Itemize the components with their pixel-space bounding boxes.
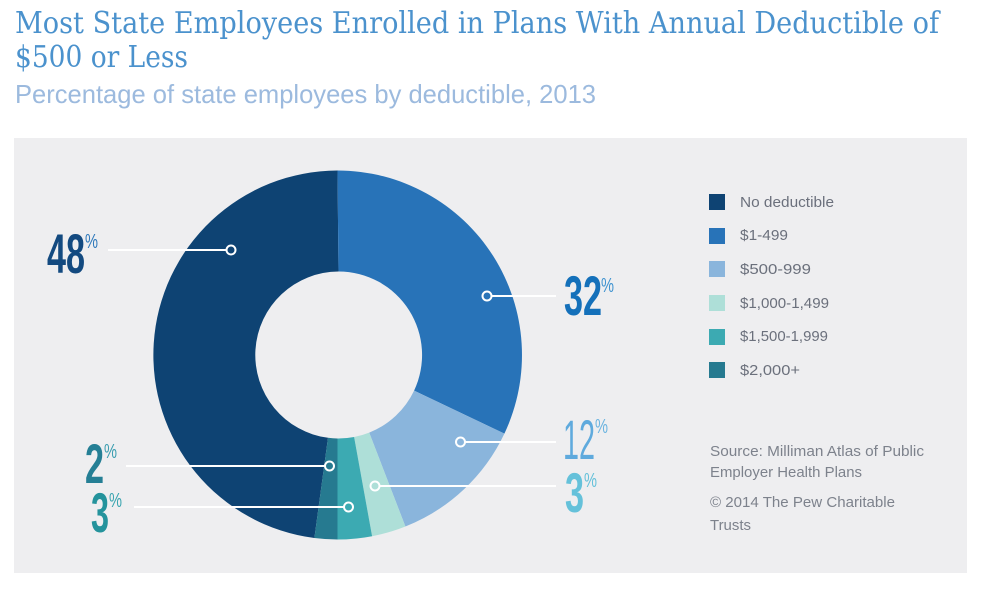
segment: $1-499 32% (338, 170, 522, 434)
callout: 32%: % (601, 275, 614, 297)
callout: 12%: 12 (563, 408, 595, 471)
panel: chart background (14, 138, 967, 573)
legend item: $2,000+ (709, 362, 800, 379)
callout: 32% (482, 264, 614, 327)
legend item: $500-999 (709, 261, 811, 278)
legend (709, 194, 834, 379)
source note: Source: Milliman Atlas of Public (710, 443, 924, 460)
callout: 3% right: % (584, 470, 597, 492)
segment: $1,500-1,999 3% (338, 437, 372, 540)
source note: Employer Health Plans (710, 464, 862, 481)
callout: 3% right (370, 461, 597, 524)
segment: no deductible 48% (153, 170, 338, 538)
callout: 3% left (91, 481, 353, 544)
title: $500 or Less (15, 40, 188, 75)
segment: $500-999 12% (369, 391, 504, 526)
callout: 32%: 32 (564, 264, 602, 327)
callout: 48% (47, 222, 236, 285)
donut chart (153, 170, 522, 540)
segment: $2,000+ 2% (314, 438, 338, 540)
callout: 2%: % (104, 441, 117, 463)
callout: 2% (85, 432, 334, 495)
callout: 12%: % (595, 416, 608, 438)
callout: 3% right: 3 (565, 461, 584, 524)
legend item: no deductible: No deductible (740, 194, 834, 211)
callout: 3% left: 3 (91, 481, 109, 544)
callout: 2%: 2 (85, 432, 104, 495)
legend item: $1,500-1,999: $1,500-1,999 (740, 328, 828, 345)
title (15, 6, 941, 75)
legend item: $500-999: $500-999 (740, 261, 811, 278)
segment: $1,000-1,499 3% (354, 433, 405, 536)
legend item: $1,000-1,499: $1,000-1,499 (740, 295, 829, 312)
legend item: $1-499: $1-499 (740, 227, 788, 244)
source note (710, 443, 924, 481)
callout: 12% (456, 408, 608, 471)
legend item: $1-499 (709, 227, 788, 244)
copyright note (710, 494, 895, 534)
subtitle: Percentage of state employees by deductible, 2013 (15, 79, 596, 109)
copyright note: Trusts (710, 517, 751, 534)
callout: 48%: % (85, 231, 98, 253)
legend item: $2,000+: $2,000+ (740, 362, 800, 379)
callout: 3% left: % (109, 490, 122, 512)
copyright note: © 2014 The Pew Charitable (710, 494, 895, 511)
callout: 48%: 48 (47, 222, 85, 285)
